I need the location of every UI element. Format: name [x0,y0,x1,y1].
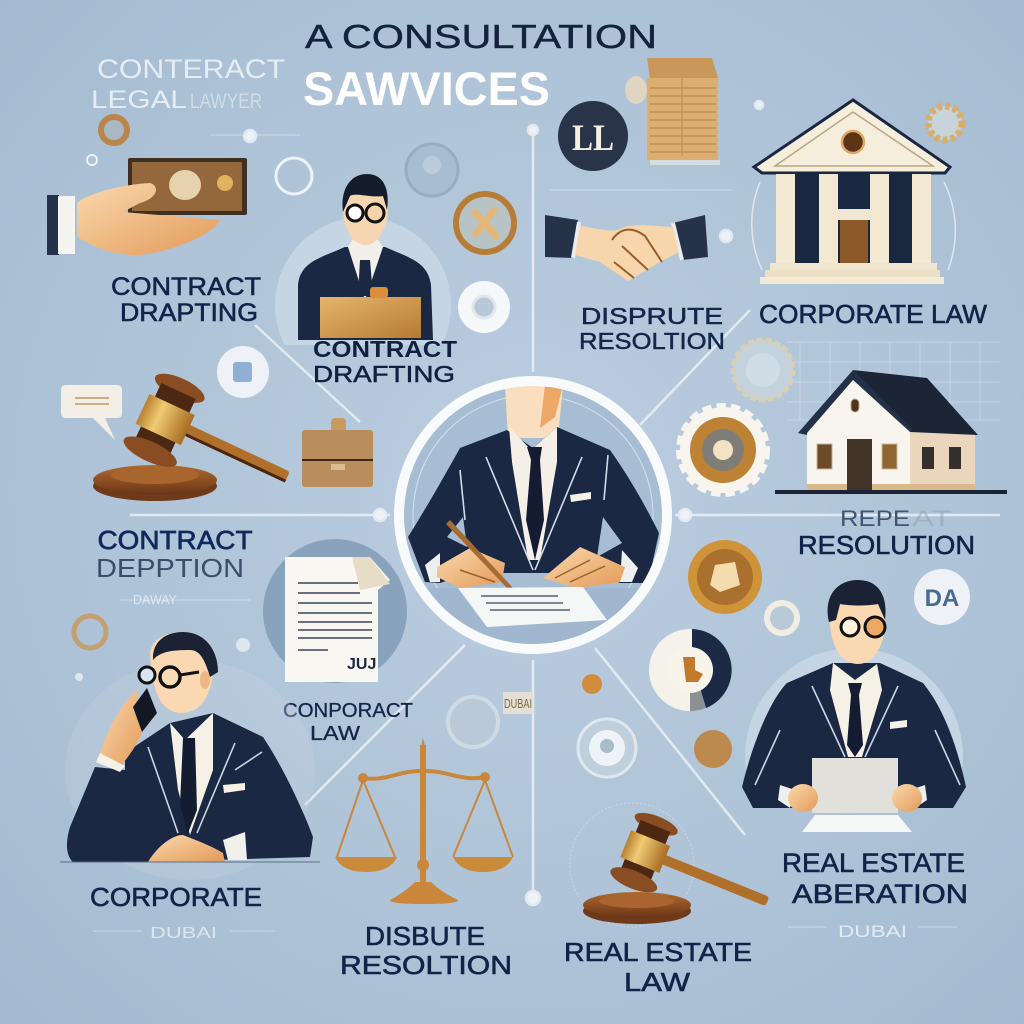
label: contract drafting center: CONTRACT [313,336,457,362]
label: real estate aberation: DUBAI [838,922,907,941]
icon: gavel [93,367,306,518]
icon: scales of justice [335,738,513,904]
faded heading [91,54,285,114]
document icon [263,539,407,683]
label: real estate law: REAL ESTATE [564,937,752,967]
label: contract deption: DAWAY [133,592,177,607]
badges lower middle: DUBAI [504,696,532,711]
label: contract drapting [111,273,261,327]
icon: briefcase [302,418,373,487]
label: real estate aberation: ABERATION [792,879,968,909]
connector lines [93,101,1000,931]
label: contract drafting center: DRAFTING [313,361,455,387]
label: dispute resolution: DISPRUTE [581,303,723,329]
label: disbute resolution [340,921,512,980]
central circle portrait [395,381,680,660]
label: repeat resolution: AT [912,506,952,531]
glass gear [733,340,793,400]
label: conporact law: LAW [310,723,360,745]
faded heading: LEGAL [91,86,187,114]
label: corporate [90,882,262,942]
label: real estate aberation [782,848,968,941]
document icon: JUJ [347,656,376,673]
title: A CONSULTATION [305,18,657,55]
decorative badges top [87,76,962,398]
icon: handshake [545,215,708,281]
icon: speech bubble [61,385,122,440]
faint blueprint grid [787,342,1000,420]
label: contract drafting center [313,336,457,387]
badges lower middle [74,603,797,777]
title [303,18,657,115]
icon: LL badge: LL [572,118,614,159]
figure: lawyer with box [275,174,451,345]
label: disbute resolution: RESOLTION [340,950,512,980]
label: dispute resolution: RESOLTION [579,328,725,354]
label: conporact law: CONPORACT [283,700,413,722]
label: conporact law [283,700,413,745]
label: contract deption [96,525,253,607]
label: disbute resolution: DISBUTE [365,921,485,951]
DA badge [914,569,970,625]
label: real estate aberation: REAL ESTATE [782,848,965,878]
figure: lawyer on phone [60,632,320,880]
icon: small gavel [570,803,782,938]
icon: courthouse [752,100,955,284]
label: contract deption: CONTRACT [98,525,253,555]
icon: LL badge [558,101,628,171]
label: contract deption: DEPPTION [96,553,244,583]
label: corporate: DUBAI [150,925,217,942]
figure: lawyer with paper [742,580,966,832]
icon: house [775,370,1007,494]
icon: segmented dial [649,629,732,711]
label: corporate: CORPORATE [90,882,262,912]
icon: hand holding banknote [47,158,247,255]
label: dispute resolution [579,303,725,354]
icon: gold medal [688,540,762,614]
label: repeat resolution [798,506,975,560]
label: repeat resolution: RESOLUTION [798,530,975,560]
icon: gold gear [680,407,766,493]
DA badge: DA [925,585,959,612]
label: real estate law: LAW [624,967,691,997]
faded heading: LAWYER [190,90,262,113]
faded heading: CONTERACT [97,54,285,84]
title: SAWVICES [303,62,550,115]
label: contract drapting: DRAPTING [120,299,258,327]
icon: law book [647,58,720,165]
label: real estate law [564,937,752,997]
label: contract drapting: CONTRACT [111,273,261,301]
label: corporate law: CORPORATE LAW [759,299,987,329]
label: repeat resolution: REPE [840,506,910,531]
